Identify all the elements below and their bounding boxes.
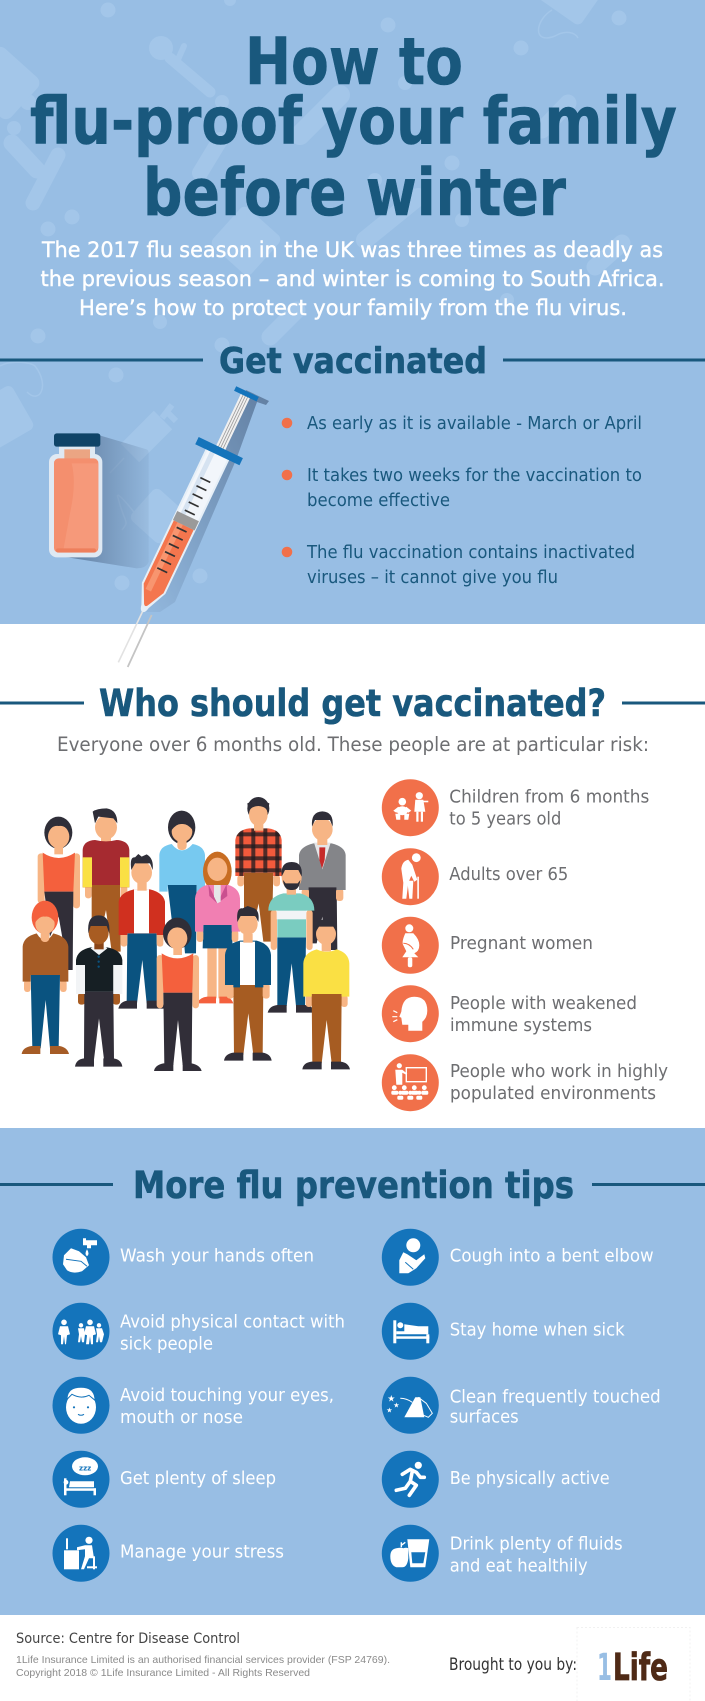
- background pattern: medical shapes: [0, 0, 627, 590]
- icon: cleaning cloth: ★: [387, 1394, 395, 1404]
- risk: children: [382, 779, 649, 836]
- tip: stay home: Stay home when sick: [450, 1321, 626, 1341]
- title: [30, 25, 677, 231]
- person: man in maroon shirt: [83, 808, 129, 952]
- vaccination facts list: [282, 414, 642, 588]
- icon: runner: [382, 1451, 439, 1508]
- risk: highly populated environments: People who work in highly: [450, 1062, 668, 1082]
- tip: stay home: [382, 1303, 626, 1360]
- bullet 2: It takes two weeks for the vaccination to: [307, 466, 642, 486]
- tip: avoid contact: Avoid physical contact with: [120, 1312, 345, 1332]
- intro text: The 2017 flu season in the UK was three times as deadly as: [41, 238, 663, 263]
- tip: cough: Cough into a bent elbow: [450, 1247, 654, 1267]
- icon: separated people: [52, 1303, 110, 1360]
- person: man in plaid shirt: [235, 797, 282, 942]
- tip: clean surfaces: surfaces: [450, 1408, 519, 1428]
- tip: fluids and food: [382, 1525, 623, 1582]
- tip: sleep: Get plenty of sleep: [120, 1469, 276, 1489]
- tip: avoid contact: [52, 1303, 345, 1360]
- risk: weakened immune systems: immune systems: [450, 1016, 592, 1036]
- icon: cleaning cloth: ★: [393, 1401, 400, 1409]
- icon: washing hands: [52, 1229, 110, 1286]
- tip: avoid touching face: [52, 1377, 334, 1434]
- icon: sleeping in bed: zzz: [79, 1464, 91, 1472]
- background: tips blue panel: [0, 1128, 705, 1615]
- icon: teacher and class: [382, 1054, 439, 1111]
- tip: cough: [382, 1229, 654, 1286]
- person: man in grey suit: [299, 811, 346, 950]
- bullet 3: viruses – it cannot give you flu: [307, 568, 558, 588]
- person: woman in light blue top: [159, 811, 205, 953]
- heading: get vaccinated: [0, 341, 705, 382]
- illustration: vial: [49, 433, 149, 568]
- logo: 1Life: 1: [597, 1646, 612, 1689]
- person: man in blue jacket: [224, 906, 272, 1061]
- person: bearded man in teal shirt: [268, 862, 315, 1013]
- intro text: [40, 238, 664, 321]
- bullet 3: The flu vaccination contains inactivated: [306, 543, 635, 563]
- tip: sleep: [52, 1451, 276, 1508]
- bullet 2: [282, 466, 642, 511]
- icon: cleaning cloth: [382, 1377, 439, 1434]
- tip: physically active: [382, 1451, 610, 1508]
- logo: 1Life: Life: [613, 1646, 668, 1689]
- tip: fluids and food: and eat healthily: [450, 1556, 588, 1576]
- risk: children: Children from 6 months: [449, 788, 649, 808]
- background: top blue panel: [0, 0, 705, 624]
- icon: children: [382, 779, 439, 836]
- icon: coughing head: [382, 985, 439, 1042]
- icon: sleeping in bed: [52, 1451, 110, 1508]
- tip: physically active: Be physically active: [450, 1469, 610, 1489]
- title: before winter: [143, 156, 566, 231]
- icon: face: [52, 1377, 110, 1434]
- tip: wash hands: Wash your hands often: [120, 1247, 314, 1267]
- person: man in yellow sweater: [302, 919, 350, 1069]
- illustration: syringe: [96, 381, 270, 673]
- risk: adults over 65: Adults over 65: [449, 865, 568, 885]
- tip: avoid contact: sick people: [120, 1334, 213, 1354]
- risk: weakened immune systems: People with weakened: [450, 994, 637, 1014]
- risk: highly populated environments: populated environments: [450, 1084, 656, 1104]
- footer: source and legal: Copyright 2018 © 1Life Insurance Limited - All Rights Reserved: [16, 1667, 310, 1679]
- tips column: right: [382, 1229, 661, 1582]
- person: woman with red hair: [22, 901, 69, 1054]
- tip: wash hands: [52, 1229, 314, 1286]
- tip: fluids and food: Drink plenty of fluids: [450, 1534, 623, 1554]
- tip: stress: [52, 1525, 284, 1582]
- icon: pregnant woman: [382, 917, 439, 974]
- tip: avoid touching face: mouth or nose: [120, 1408, 243, 1428]
- tips column: left: [52, 1229, 345, 1582]
- icon: cleaning cloth: ★: [386, 1406, 393, 1414]
- heading: get vaccinated: Get vaccinated: [219, 341, 487, 382]
- heading: more flu prevention tips: More flu prevention tips: [133, 1164, 574, 1207]
- risk: highly populated environments: [382, 1054, 668, 1111]
- tip: clean surfaces: Clean frequently touched: [450, 1388, 661, 1408]
- bullet 1: As early as it is available - March or April: [307, 414, 642, 434]
- footer: source and legal: Source: Centre for Disease Control: [16, 1631, 240, 1647]
- subheading: at risk: Everyone over 6 months old. These people are at particular risk:: [57, 733, 649, 756]
- risk groups list: [382, 779, 668, 1111]
- tip: avoid touching face: Avoid touching your eyes,: [120, 1386, 334, 1406]
- person: woman in pink jacket: [195, 852, 240, 1003]
- footer: brought to you by: Brought to you by:: [449, 1655, 577, 1674]
- person: woman in orange top, front: [154, 918, 202, 1071]
- tip: clean surfaces: [382, 1377, 661, 1434]
- heading: who should get vaccinated: Who should get vaccinated?: [99, 682, 606, 725]
- icon: apple and glass: [382, 1525, 439, 1582]
- intro text: the previous season – and winter is coming to South Africa.: [40, 267, 664, 292]
- person: man in dark polo: [75, 915, 122, 1067]
- bullet 3: [282, 543, 635, 588]
- tip: stress: Manage your stress: [120, 1543, 284, 1563]
- icon: person at desk: [52, 1525, 110, 1582]
- logo: 1Life: [577, 1628, 690, 1701]
- footer: source and legal: [16, 1631, 390, 1679]
- risk: pregnant women: Pregnant women: [450, 934, 593, 954]
- risk: weakened immune systems: [382, 985, 637, 1042]
- icon: coughing into elbow: [382, 1229, 439, 1286]
- footer: source and legal: 1Life Insurance Limited is an authorised financial services provider (FSP 24769).: [16, 1654, 390, 1666]
- title: How to: [245, 25, 463, 100]
- risk: pregnant women: [382, 917, 593, 974]
- icon: elderly person: [382, 848, 439, 905]
- person: man in red jacket: [118, 854, 165, 1009]
- illustration: crowd of people: [22, 797, 350, 1071]
- bullet 2: become effective: [307, 491, 450, 511]
- risk: children: to 5 years old: [449, 810, 561, 830]
- risk: adults over 65: [382, 848, 568, 905]
- icon: bed: [382, 1303, 439, 1360]
- intro text: Here’s how to protect your family from the flu virus.: [79, 296, 627, 321]
- person: woman in orange top: [38, 817, 80, 970]
